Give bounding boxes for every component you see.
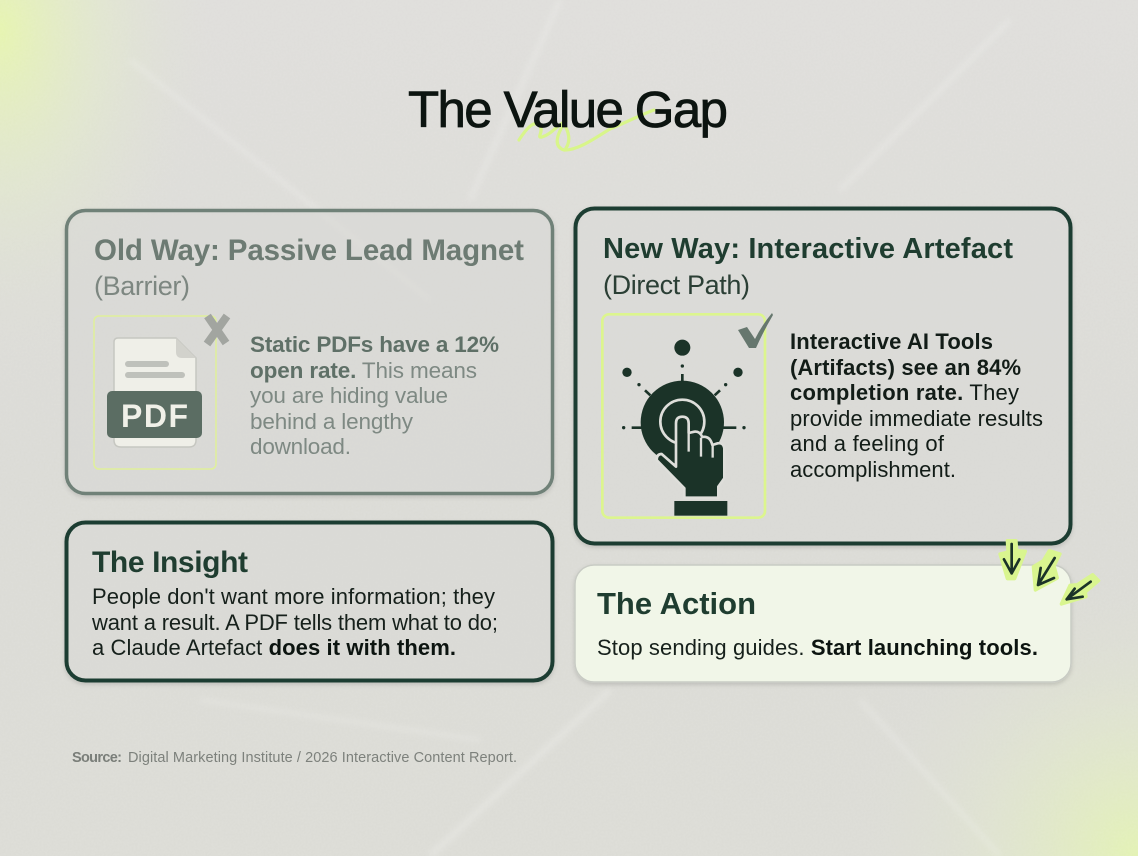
new way subheading: (Direct Path): [603, 270, 750, 300]
new way body text: Interactive AI Tools: [790, 329, 993, 354]
new way body text: completion rate. They: [790, 380, 1019, 405]
icon: hand tapping a button: [602, 314, 765, 518]
icon frame and PDF document: PDF: [121, 398, 188, 434]
insight body text: [91, 584, 498, 660]
action heading: The Action: [597, 586, 756, 621]
panel: the insight: [66, 522, 552, 680]
icon: cross mark: [207, 316, 227, 344]
old way body text: download.: [250, 434, 351, 459]
panel: new way interactive artefact: [576, 208, 1070, 544]
source note: Source:: [72, 750, 122, 766]
insight body text: a Claude Artefact does it with them.: [92, 635, 456, 660]
old way body text: behind a lengthy: [250, 409, 414, 434]
old way subheading: (Barrier): [94, 271, 190, 301]
panel: the action: [575, 565, 1071, 682]
icon: three arrows pointing to action panel: [1000, 541, 1099, 604]
new way body text: provide immediate results: [790, 406, 1043, 431]
new way body text: (Artifacts) see an 84%: [790, 355, 1021, 380]
insight heading: The Insight: [92, 546, 248, 579]
source note: Digital Marketing Institute / 2026 Interactive Content Report.: [128, 750, 517, 766]
panel: old way passive lead magnet: [66, 210, 552, 494]
icon: check mark: [738, 313, 773, 348]
old way body text: Static PDFs have a 12%: [250, 332, 499, 357]
insight body text: People don't want more information; they: [92, 584, 495, 609]
new way body text: [790, 329, 1043, 482]
decorative scribble under title: [519, 110, 654, 150]
old way heading: Old Way: Passive Lead Magnet: [94, 234, 524, 267]
new way body text: accomplishment.: [790, 457, 956, 482]
icon frame and PDF document: [94, 316, 216, 469]
action body text: Stop sending guides. Start launching tools.: [597, 635, 1038, 660]
insight body text: want a result. A PDF tells them what to do;: [91, 610, 498, 635]
new way body text: and a feeling of: [790, 431, 945, 456]
title: The Value Gap: [408, 81, 728, 138]
old way body text: you are hiding value: [250, 383, 448, 408]
old way body text: open rate. This means: [250, 358, 477, 383]
new way heading: New Way: Interactive Artefact: [603, 233, 1013, 265]
old way body text: [250, 332, 499, 459]
